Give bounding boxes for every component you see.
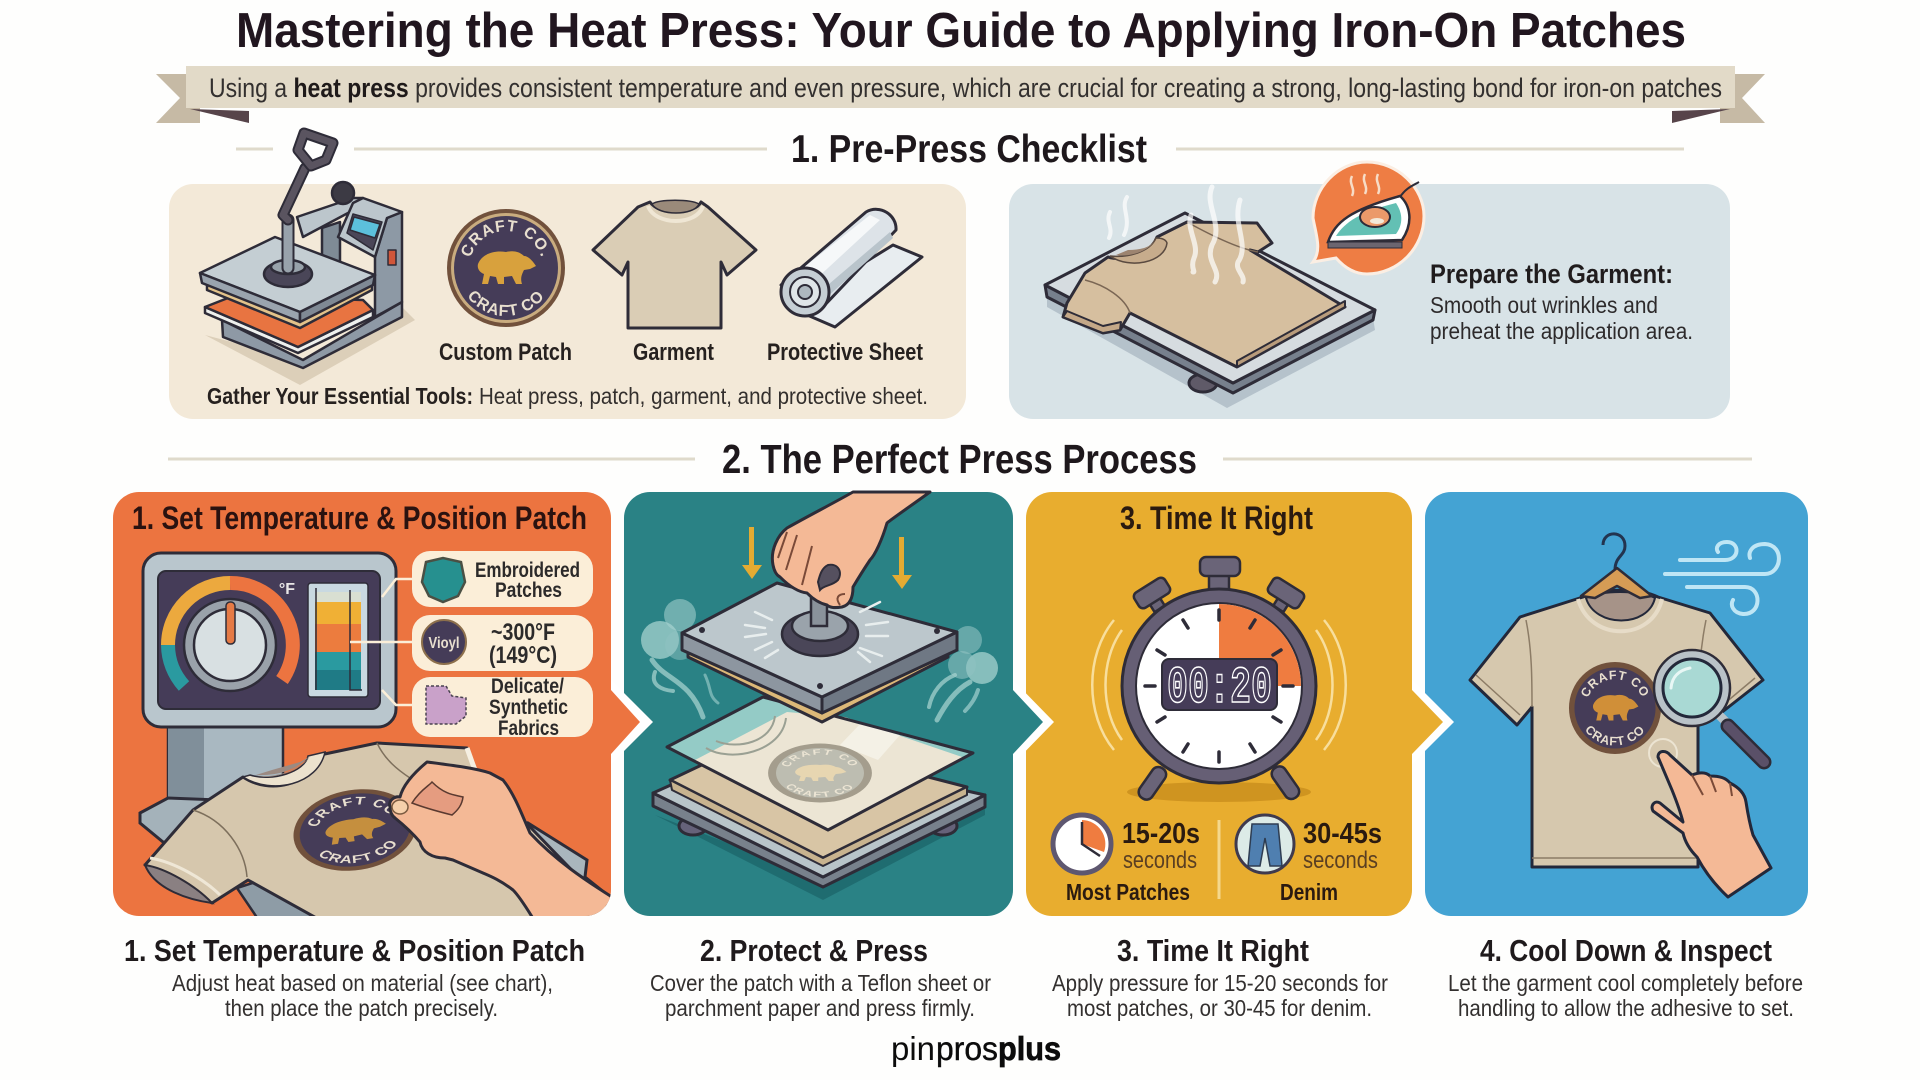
title: Mastering the Heat Press: Your Guide to Applying Iron-On Patches	[236, 4, 1686, 58]
prepare text: Prepare the Garment:	[1430, 259, 1673, 289]
pill: delicate fabrics: Delicate/	[491, 675, 564, 698]
icon: magnifying glass	[1654, 650, 1764, 762]
pill: embroidered patches: Patches	[495, 579, 562, 602]
arrow: step 1 to step 2	[604, 680, 653, 764]
icon: custom patch: CRAFT CO.	[462, 220, 547, 256]
tools description: Heat press, patch, garment, and protective sheet.	[479, 383, 928, 409]
timing: denim: seconds	[1303, 847, 1378, 874]
item labels: Protective Sheet	[767, 339, 923, 366]
caption: step 2: 2. Protect & Press	[700, 933, 928, 968]
wind lines	[1665, 542, 1779, 614]
control monitor: °F	[279, 581, 295, 598]
patch on shirt: CRAFT CO	[320, 841, 396, 864]
panel: step 1 set temperature	[113, 492, 611, 916]
hand placing patch	[390, 762, 612, 925]
stopwatch	[1092, 557, 1346, 802]
pill: vinyl temperature: Vioyl	[428, 635, 460, 652]
shirt patch: CRAFT CO	[1582, 670, 1648, 696]
colour scale	[308, 583, 368, 697]
caption: step 3: 3. Time It Right	[1117, 933, 1309, 968]
caption: step 1	[124, 933, 585, 1021]
gauge dial	[168, 583, 293, 686]
caption: step 4: 4. Cool Down & Inspect	[1480, 933, 1772, 968]
caption: step 1: 1. Set Temperature & Position Patch	[124, 933, 585, 968]
prepare text	[1430, 259, 1693, 344]
step 1 header: 1. Set Temperature & Position Patch	[132, 500, 587, 536]
faded patch: CRAFT CO	[786, 784, 852, 797]
tools description	[207, 383, 928, 409]
timing: denim	[1236, 815, 1382, 905]
caption: step 3: most patches, or 30-45 for denim.	[1067, 995, 1372, 1021]
top plate	[682, 583, 957, 722]
faded patch	[768, 744, 872, 802]
item labels: Custom Patch	[439, 339, 572, 366]
hand checking	[1649, 739, 1771, 897]
teflon sheet and shirt	[667, 697, 973, 830]
prepare text: preheat the application area.	[1430, 318, 1693, 344]
prepare text: Smooth out wrinkles and	[1430, 292, 1658, 318]
caption: step 3	[1052, 933, 1388, 1021]
timing: denim: Denim	[1280, 879, 1338, 905]
arrow: step 3 to step 4	[1405, 680, 1454, 764]
item labels	[439, 339, 923, 366]
steam clouds	[641, 599, 998, 720]
icon: iron bubble	[1313, 162, 1424, 274]
hand pressing	[772, 492, 930, 608]
item labels: Garment	[633, 339, 714, 366]
caption: step 1: Adjust heat based on material (see chart),	[172, 970, 553, 996]
timing: most patches: Most Patches	[1066, 879, 1190, 905]
faded patch: CRAFT CO	[782, 749, 857, 766]
icon: custom patch: CRAFT CO	[469, 291, 542, 316]
shirt patch: CRAFT CO	[1586, 726, 1644, 746]
panel: step 3 time it right	[1026, 492, 1412, 916]
pill: delicate fabrics	[412, 675, 593, 740]
caption: step 2: Cover the patch with a Teflon sheet or	[650, 970, 991, 996]
steam	[1108, 187, 1243, 282]
timing: most patches: 15-20s	[1122, 818, 1200, 850]
caption: step 3: Apply pressure for 15-20 seconds for	[1052, 970, 1388, 996]
pill: embroidered patches	[412, 551, 593, 607]
pill: embroidered patches: Embroidered	[475, 559, 580, 582]
sheet outline	[667, 697, 973, 830]
shirt collar	[1085, 222, 1258, 313]
logo: pinprosplus: plus	[998, 1030, 1061, 1067]
caption: step 4	[1448, 933, 1803, 1021]
section heading: press process: 2. The Perfect Press Process	[722, 436, 1197, 482]
divider	[1218, 820, 1220, 899]
panel: prepare the garment	[1009, 162, 1730, 419]
intro banner	[156, 66, 1765, 123]
caption: step 2	[650, 933, 991, 1021]
panel: step 4 cool down	[1425, 492, 1808, 916]
icon: custom patch	[447, 209, 565, 327]
caption: step 2: parchment paper and press firmly.	[665, 995, 975, 1021]
section heading: pre-press checklist: 1. Pre-Press Checklist	[791, 128, 1147, 171]
pill: vinyl temperature: (149°C)	[489, 642, 557, 669]
press knob	[782, 592, 858, 656]
pill: vinyl temperature: ~300°F	[491, 619, 555, 646]
panel: step 2 protect and press	[624, 490, 1013, 916]
press arrows	[742, 527, 912, 589]
hanger	[1581, 534, 1652, 598]
caption: step 4: Let the garment cool completely before	[1448, 970, 1803, 996]
timing: denim: 30-45s	[1303, 818, 1382, 850]
lower plate and pad	[653, 735, 985, 900]
stopwatch: 00:20	[1167, 659, 1272, 718]
pill: delicate fabrics: Fabrics	[498, 717, 559, 740]
patch on shirt	[294, 789, 414, 871]
timing: most patches	[1053, 815, 1200, 905]
logo: pinprosplus: pin	[891, 1030, 935, 1067]
caption: step 1: then place the patch precisely.	[225, 995, 498, 1021]
banner text: Using a heat press provides consistent temperature and even pressure, which are crucial for creating a strong, long-lasting bond for iron-on patches	[209, 73, 1722, 103]
pill: vinyl temperature	[412, 615, 593, 671]
logo: pinprosplus	[891, 1030, 1061, 1067]
connector lines	[350, 579, 412, 705]
icon: protective sheet roll	[781, 209, 922, 327]
step 3 header: 3. Time It Right	[1120, 500, 1313, 536]
patch on shirt: CRAFT CO	[308, 796, 390, 826]
control monitor	[143, 553, 396, 727]
shirt patch	[1569, 662, 1661, 754]
icon: garment t-shirt	[593, 200, 756, 328]
caption: step 4: handling to allow the adhesive to set.	[1458, 995, 1794, 1021]
pill: delicate fabrics: Synthetic	[489, 696, 568, 719]
step 1 scene	[138, 728, 611, 916]
panel: gather tools	[169, 128, 966, 419]
arrow: step 2 to step 3	[1006, 680, 1054, 764]
digital readout	[1162, 659, 1277, 710]
inspected t-shirt	[1470, 590, 1763, 867]
illustration: shirt on press platen	[1045, 213, 1375, 408]
logo: pinprosplus: pros	[936, 1030, 998, 1067]
tools description: Gather Your Essential Tools:	[207, 383, 473, 409]
icon: heat press	[200, 133, 415, 385]
timing: most patches: seconds	[1123, 847, 1197, 874]
